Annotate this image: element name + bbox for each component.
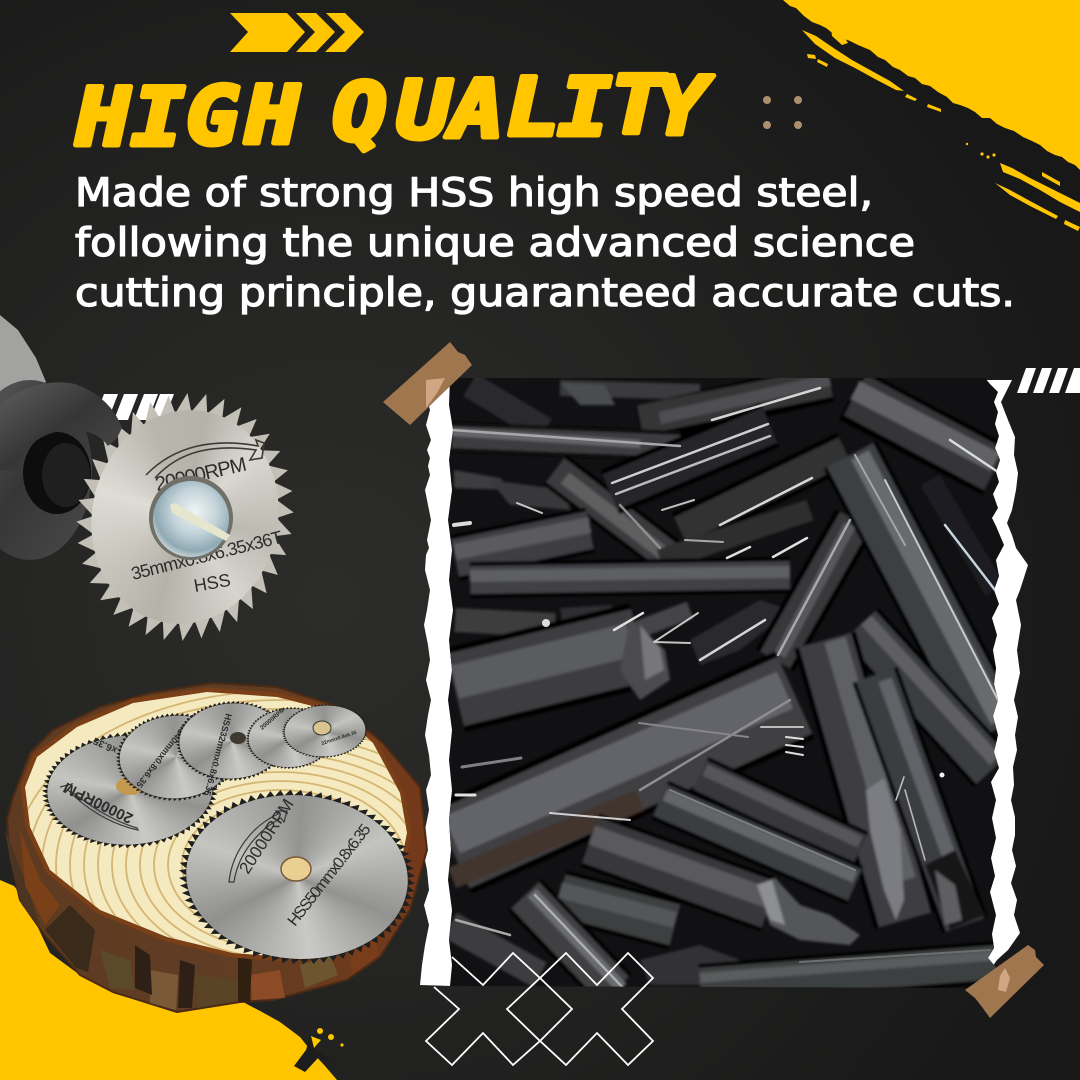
rotary tool upper crescent — [0, 382, 122, 470]
wood bark body — [7, 683, 427, 1012]
bit highlights crisp layer — [452, 388, 998, 990]
wood top face — [25, 692, 407, 956]
small saw blade 35mm — [21, 332, 349, 702]
blade smallest: 22mmx0.8x6.35 — [321, 730, 358, 747]
torn white paper — [420, 380, 1028, 986]
blade small right — [239, 701, 341, 775]
wood slice with saw blades — [5, 682, 428, 1013]
blade arrow — [146, 440, 264, 478]
blade label hss: HSS — [192, 570, 232, 596]
bark texture — [5, 830, 378, 1010]
tape top left — [383, 342, 472, 425]
yellow splatter — [294, 1028, 344, 1072]
body text: following the unique advanced science — [75, 221, 915, 266]
white outlined cross pattern — [426, 953, 653, 1065]
top right yellow brush corner — [783, 0, 1080, 231]
blade small right: 20000RPM — [259, 708, 286, 732]
white hatch stripes left — [94, 394, 174, 420]
bit shading soft layer — [450, 380, 1000, 990]
blade large HSS50mm: HSS50mmx0.8x6.35 — [285, 821, 375, 929]
blade small left — [106, 704, 246, 810]
bottom left yellow brush corner — [0, 880, 337, 1080]
rotary tool lower body — [0, 315, 92, 560]
blade 20000RPM left: 20000RPM — [61, 779, 136, 827]
blade label rpm: 20000RPM — [153, 454, 249, 496]
blade smallest — [275, 698, 375, 764]
blade small left: HSS40mmx0.8x6.35 — [134, 717, 194, 790]
blade large HSS50mm — [159, 771, 435, 983]
photo: pile of end mill bits — [440, 370, 1010, 995]
body text: Made of strong HSS high speed steel, — [75, 171, 873, 216]
wood rim band — [25, 692, 407, 957]
body text: cutting principle, guaranteed accurate cuts. — [75, 271, 1015, 316]
blade label size: 35mmx0.8x6.35x36T — [129, 527, 284, 584]
top arrow chevrons — [230, 13, 364, 52]
decorative dots — [763, 96, 802, 129]
blade large HSS50mm: 20000RPM — [235, 795, 298, 877]
blade 20000RPM left — [28, 720, 232, 860]
blade middle: HSS32mmx0.8x6.35 — [202, 712, 234, 797]
blade middle — [167, 693, 297, 797]
body text — [75, 171, 1015, 316]
blade 20000RPM left: x6.35 — [92, 735, 119, 755]
tape bottom right — [965, 945, 1044, 1018]
white hatch stripes right — [1017, 368, 1080, 393]
blade screw — [149, 476, 233, 560]
title: HIGH QUALITY — [75, 60, 714, 165]
